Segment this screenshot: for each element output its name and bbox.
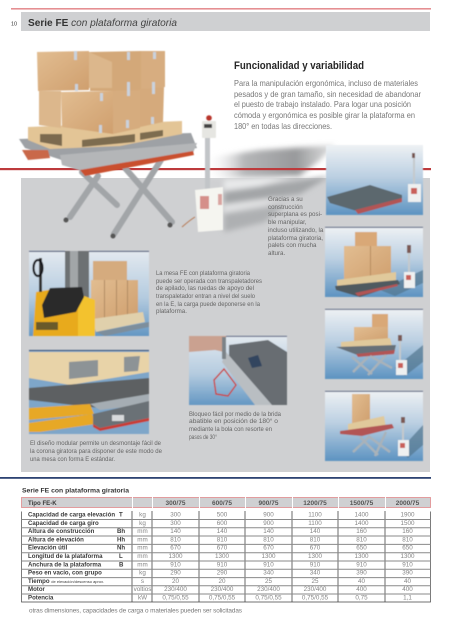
- table header: 900/75: [259, 500, 279, 507]
- row: elevacion util: 670: [217, 545, 228, 552]
- cable: [182, 217, 195, 227]
- row: potencia: kW: [138, 594, 147, 601]
- row: altura construccion: 140: [310, 528, 321, 535]
- intro paragraph: 180° en todas las direcciones.: [234, 121, 332, 131]
- row: potencia: 0,75/0,55: [162, 594, 189, 601]
- table header: 1500/75: [350, 500, 374, 507]
- row: longitud: 1300: [354, 553, 369, 560]
- row: motor: voltios: [134, 586, 151, 593]
- row: longitud: 1300: [400, 553, 415, 560]
- row: altura elevacion: Altura de elevación: [28, 536, 84, 543]
- row: elevacion util: 670: [170, 545, 181, 552]
- caption: stacking truck: [156, 270, 262, 315]
- row: altura construccion: 140: [170, 528, 181, 535]
- row: capacidad giro: 1500: [400, 520, 415, 527]
- row: capacidad elevacion: kg: [139, 512, 146, 518]
- row: longitud: 1300: [308, 553, 322, 560]
- row: capacidad giro: 1400: [354, 520, 369, 527]
- row: anchura: Anchura de la plataforma: [28, 561, 102, 568]
- row: potencia: Potencia: [28, 594, 54, 601]
- specification table: [22, 497, 430, 602]
- row: elevacion util: mm: [137, 545, 148, 552]
- row: altura elevacion: mm: [137, 536, 148, 543]
- row: tiempo: Tiempo de elevación/descenso aprox.: [28, 578, 104, 585]
- caption: superflat construction: palets con mucha: [268, 242, 317, 249]
- row: peso: 340: [263, 570, 274, 577]
- page number: 10: [11, 22, 17, 28]
- row: capacidad elevacion: [28, 512, 415, 518]
- row: anchura: 910: [310, 561, 321, 568]
- row: altura construccion: 160: [402, 528, 413, 535]
- row: longitud: L: [119, 553, 123, 560]
- blue divider: [0, 477, 431, 479]
- row: tiempo: 20: [218, 578, 226, 585]
- row: capacidad elevacion: 500: [217, 512, 228, 518]
- row: potencia: 1,1: [403, 594, 412, 601]
- caption: modular design: una mesa con forma E estándar.: [30, 456, 115, 463]
- red divider: [0, 168, 431, 170]
- table header: [22, 497, 430, 508]
- row: elevacion util: Elevación útil: [28, 545, 68, 552]
- row: altura construccion: 140: [217, 528, 228, 535]
- caption: modular design: [30, 440, 163, 463]
- caption: stacking truck: La mesa FE con plataforma giratoria: [156, 270, 251, 277]
- row: capacidad giro: Capacidad de carga giro: [28, 520, 99, 527]
- pallet: [28, 121, 182, 149]
- header rule: [11, 8, 431, 10]
- caption: modular design: la corona giratora para disponer de este modo de: [30, 448, 163, 455]
- caption: stacking truck: de apilado, las ruedas de apoyo del: [156, 285, 254, 292]
- row: anchura: 910: [356, 561, 367, 568]
- row: tiempo: 25: [311, 578, 319, 585]
- row: capacidad elevacion: 900: [263, 512, 274, 518]
- table header: 2000/75: [396, 500, 420, 507]
- photo: pallet truck entering the table: [29, 251, 149, 336]
- table footnote: otras dimensiones, capacidades de carga o materiales pueden ser solicitadas: [29, 608, 242, 614]
- photo: pallet on low platform: [325, 227, 423, 297]
- row: peso: 390: [356, 570, 367, 577]
- row: peso: kg: [139, 570, 146, 577]
- lift wheels: [64, 218, 172, 238]
- row: anchura: [28, 561, 413, 568]
- row: anchura: 910: [170, 561, 181, 568]
- row: altura construccion: Altura de construcción: [28, 528, 95, 535]
- control column: [205, 138, 210, 190]
- table title: Serie FE con plataforma giratoria: [22, 488, 129, 494]
- section heading: Funcionalidad y variabilidad: [234, 60, 364, 72]
- caption: superflat construction: [268, 196, 324, 257]
- row: potencia: 0,75/0,55: [255, 594, 282, 601]
- caption: superflat construction: Gracias a su: [268, 196, 303, 203]
- row: motor: 230/400: [164, 586, 187, 593]
- row: capacidad giro: kg: [139, 520, 146, 527]
- row: peso: 290: [170, 570, 181, 577]
- row: motor: 400: [356, 586, 367, 593]
- caption: stacking truck: puede ser operada con transpaletadores: [156, 278, 262, 285]
- row: tiempo: 40: [404, 578, 411, 585]
- main photo: scissor lift table with pallet: [19, 51, 223, 238]
- row: tiempo: [28, 578, 411, 585]
- row: potencia: [28, 594, 412, 601]
- row: altura elevacion: 810: [402, 536, 413, 543]
- row: potencia: 0,75/0,55: [302, 594, 329, 601]
- row: elevacion util: Nh: [117, 545, 125, 552]
- row: motor: 400: [402, 586, 413, 593]
- intro paragraph: cómoda y ergonómica es posible girar la plataforma en: [234, 110, 415, 120]
- row: tiempo: s: [141, 578, 144, 585]
- row: peso: Peso en vacío, con grupo: [28, 570, 102, 577]
- intro paragraph: Para la manipulación ergonómica, incluso de materiales: [234, 78, 418, 88]
- row: anchura: B: [119, 561, 124, 568]
- row: potencia: 0,75: [355, 594, 368, 601]
- caption: superflat construction: superplana es posi-: [268, 211, 322, 218]
- row: elevacion util: 650: [402, 545, 413, 552]
- row: longitud: 1300: [215, 553, 229, 560]
- row: anchura: mm: [137, 561, 148, 568]
- row: longitud: Longitud de la plataforma: [28, 553, 103, 560]
- row: altura construccion: 140: [263, 528, 274, 535]
- row: potencia: 0,75/0,55: [209, 594, 236, 601]
- row: altura construccion: mm: [137, 528, 148, 535]
- row: capacidad elevacion: 1900: [400, 512, 415, 518]
- caption: superflat construction: construcción: [268, 204, 303, 211]
- row: capacidad elevacion: Capacidad de carga elevación: [28, 512, 115, 518]
- row: motor: Motor: [28, 586, 46, 593]
- photo: rotated table with tall stack: [325, 391, 423, 461]
- caption: superflat construction: incluso utilizando, la: [268, 227, 324, 234]
- row: longitud: 1300: [168, 553, 183, 560]
- caption: locking: abatible en posición de 180° o: [189, 418, 279, 425]
- row: capacidad elevacion: 300: [170, 512, 181, 518]
- row: motor: [28, 586, 413, 593]
- motion swoosh: [205, 145, 335, 232]
- row: elevacion util: 650: [356, 545, 367, 552]
- row: capacidad giro: 1100: [308, 520, 322, 527]
- caption: stacking truck: transpaletador entran a nivel del suelo: [156, 293, 256, 300]
- intro paragraph: pesados y de gran tamaño, sin necesidad de abandonar: [234, 89, 421, 99]
- caption: locking: mediante la bola con resorte en: [189, 426, 273, 433]
- lift legs: [70, 160, 172, 234]
- row: altura elevacion: [28, 536, 413, 543]
- row: capacidad giro: 900: [263, 520, 274, 527]
- row: peso: 290: [217, 570, 228, 577]
- row: anchura: 910: [263, 561, 274, 568]
- row: altura construccion: Bh: [117, 528, 125, 535]
- table header: 600/75: [212, 500, 232, 507]
- row: capacidad giro: 600: [217, 520, 228, 527]
- row: elevacion util: 670: [310, 545, 321, 552]
- photo: raised table with low stack: [325, 309, 423, 379]
- row: capacidad giro: [28, 520, 415, 527]
- row: tiempo: 20: [172, 578, 179, 585]
- cartons: [37, 51, 89, 91]
- row: altura construccion: [28, 528, 413, 535]
- row: elevacion util: [28, 545, 413, 552]
- lift platform: [19, 133, 197, 166]
- caption: locking: Bloqueo fácil por medio de la brida: [189, 411, 282, 418]
- gray background panel: [21, 178, 430, 472]
- row: altura elevacion: Hh: [117, 536, 125, 543]
- row: longitud: mm: [137, 553, 148, 560]
- title: Serie FE con plataforma giratoria: [28, 18, 177, 29]
- photo: locking flange detail: [189, 336, 287, 405]
- intro paragraph: [234, 78, 421, 131]
- row: altura elevacion: 810: [170, 536, 181, 543]
- caption: stacking truck: en la E, la carga puede deponerse en la: [156, 301, 261, 308]
- intro paragraph: el puesto de trabajo instalado. Para logar una posición: [234, 99, 411, 109]
- row: peso: 340: [310, 570, 321, 577]
- row: anchura: 910: [217, 561, 228, 568]
- row: tiempo: 25: [265, 578, 272, 585]
- table header: Tipo FE-K: [28, 500, 57, 507]
- row: capacidad giro: 300: [170, 520, 181, 527]
- row: motor: 230/400: [304, 586, 327, 593]
- row: capacidad elevacion: 1400: [354, 512, 369, 518]
- row: altura elevacion: 810: [263, 536, 274, 543]
- row: peso: 390: [402, 570, 413, 577]
- carton straps: [74, 51, 156, 133]
- row: motor: 230/400: [257, 586, 280, 593]
- caption: superflat construction: altura.: [268, 250, 285, 257]
- table header: 300/75: [166, 500, 186, 507]
- row: longitud: [28, 553, 415, 560]
- row: peso: [28, 570, 413, 577]
- row: altura elevacion: 810: [217, 536, 228, 543]
- row: motor: 230/400: [211, 586, 234, 593]
- table header: 1200/75: [303, 500, 327, 507]
- caption: modular design: El diseño modular permite un desmontaje fácil de: [30, 440, 162, 447]
- row: tiempo: 40: [358, 578, 365, 585]
- caption: stacking truck: plataforma.: [156, 308, 187, 315]
- table grid: [22, 511, 430, 602]
- row: longitud: 1300: [261, 553, 276, 560]
- row: elevacion util: 670: [263, 545, 274, 552]
- row: capacidad elevacion: 1100: [308, 512, 322, 518]
- photo: low platform: [326, 145, 423, 215]
- caption: superflat construction: ble manipular,: [268, 219, 307, 226]
- caption: locking: [189, 411, 282, 441]
- caption: superflat construction: plataforma giratoria,: [268, 235, 323, 242]
- row: anchura: 910: [402, 561, 413, 568]
- caption: locking: pasos de 30°: [189, 434, 217, 441]
- control box: [195, 187, 223, 232]
- photo: detachable rotating crown: [29, 350, 149, 434]
- row: altura elevacion: 810: [310, 536, 321, 543]
- row: altura construccion: 160: [356, 528, 367, 535]
- row: altura elevacion: 810: [356, 536, 367, 543]
- header bar: [21, 12, 430, 31]
- row: capacidad elevacion: T: [119, 512, 123, 518]
